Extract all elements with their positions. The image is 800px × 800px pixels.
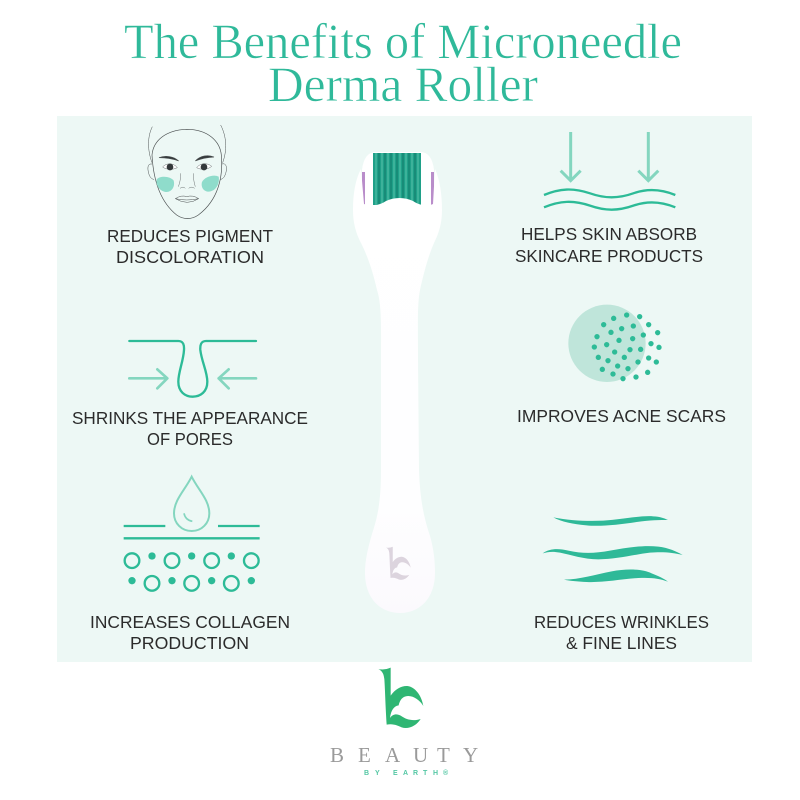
panel: improves acne scars bbox=[517, 305, 726, 426]
icon: arrows into skin bbox=[544, 132, 675, 210]
label: helps skin absorb skincare products bbox=[515, 224, 703, 266]
handle bbox=[353, 169, 442, 613]
label: reduces wrinkles & fine lines: & FINE LINES bbox=[566, 633, 677, 653]
roller white barrel bbox=[362, 152, 434, 210]
panel: shrinks pores bbox=[72, 341, 308, 449]
label: shrinks the appearance of pores bbox=[72, 408, 308, 449]
title: The Benefits of Microneedle bbox=[124, 13, 682, 69]
label: helps skin absorb skincare products: HELPS SKIN ABSORB bbox=[521, 224, 697, 244]
label: reduces pigment discoloration: REDUCES PIGMENT bbox=[107, 226, 273, 246]
label: reduces wrinkles & fine lines: REDUCES WRINKLES bbox=[534, 612, 709, 632]
roller green needles bbox=[373, 153, 421, 205]
icon: face bbox=[148, 125, 226, 218]
title: Derma Roller bbox=[268, 56, 538, 112]
panel: benefits background bbox=[57, 116, 752, 662]
title bbox=[124, 13, 682, 112]
tagline: BYEARTH® bbox=[364, 769, 449, 777]
icon: wrinkle lines bbox=[543, 516, 683, 582]
label: improves acne scars: IMPROVES ACNE SCARS bbox=[517, 406, 726, 426]
roller purple ends bbox=[362, 172, 434, 206]
icon: derma roller bbox=[353, 152, 442, 613]
panel: reduces wrinkles bbox=[534, 516, 709, 653]
label: helps skin absorb skincare products: SKINCARE PRODUCTS bbox=[515, 246, 703, 266]
label: shrinks the appearance of pores: SHRINKS THE APPEARANCE bbox=[72, 408, 308, 428]
panel: helps skin absorb bbox=[515, 132, 703, 266]
roller logo mark bbox=[386, 547, 411, 580]
label: shrinks the appearance of pores: OF PORES bbox=[147, 429, 233, 449]
label: increases collagen production bbox=[90, 612, 290, 653]
wordmark: BEAUTY bbox=[330, 743, 478, 767]
icon: droplet and collagen bbox=[124, 477, 260, 591]
label: increases collagen production: PRODUCTION bbox=[130, 633, 249, 653]
panel: increases collagen bbox=[90, 477, 290, 653]
label: reduces wrinkles & fine lines bbox=[534, 612, 709, 653]
label: increases collagen production: INCREASES COLLAGEN bbox=[90, 612, 290, 632]
logo: beauty by earth bbox=[330, 668, 478, 777]
icon: acne scar circle and dots bbox=[568, 305, 662, 382]
icon: pore with arrows bbox=[129, 341, 256, 397]
panel: reduces pigment discoloration bbox=[107, 125, 273, 267]
label: reduces pigment discoloration bbox=[107, 226, 273, 267]
logo mark bbox=[378, 668, 423, 728]
label: reduces pigment discoloration: DISCOLORATION bbox=[116, 247, 264, 267]
